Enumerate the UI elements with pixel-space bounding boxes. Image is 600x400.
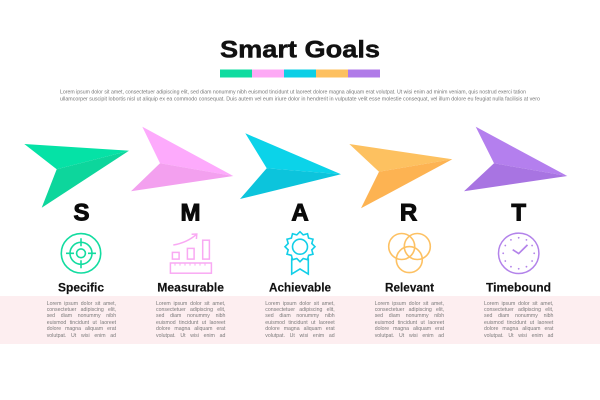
text: achievable: consectetuer adipiscing elit, xyxy=(265,307,335,313)
intro text: ullamcorper suscipit lobortis nisl ut aliquip ex ea commodo consequat. Duis autem vel eum iriure dolor in hendrerit in vulputate velit esse molestie consequat, vel illum dolore eu feugiat nulla facilisis at vero xyxy=(60,96,540,102)
SMART letters: T xyxy=(511,200,526,226)
text: specific: sed diam nonummy nibh xyxy=(47,313,116,319)
text: relevant: consectetuer adipiscing elit, xyxy=(375,307,444,313)
text: specific: dolore magna aliquam erat xyxy=(47,326,116,332)
text: measurable: volutpat. Ut wisi enim ad xyxy=(156,333,225,339)
icon: target xyxy=(61,234,101,273)
SMART letters xyxy=(73,200,526,226)
text: specific: euismod tincidunt ut laoreet xyxy=(47,320,116,326)
text: relevant: sed diam nonummy nibh xyxy=(375,313,444,319)
colour legend bar xyxy=(220,70,380,78)
text: timebound: volutpat. Ut wisi enim ad xyxy=(484,333,553,339)
text: relevant: dolore magna aliquam erat xyxy=(375,326,444,332)
text: relevant: euismod tincidunt ut laoreet xyxy=(375,320,444,326)
text: measurable: Lorem ipsum dolor sit amet, xyxy=(156,300,225,306)
text: achievable: Lorem ipsum dolor sit amet, xyxy=(265,300,335,306)
goal labels xyxy=(58,282,551,294)
SMART letters: S xyxy=(73,200,90,226)
text: achievable: dolore magna aliquam erat xyxy=(265,326,335,332)
text: specific xyxy=(46,300,116,339)
text: measurable: euismod tincidunt ut laoreet xyxy=(156,320,225,326)
pink text band xyxy=(0,296,600,344)
intro text: Lorem ipsum dolor sit amet, consectetuer adipiscing elit, sed diam nonummy nibh euismod tincidunt ut laoreet dolore magna aliquam erat volutpat. Ut wisi enim ad minim veniam, quis nostrud exerci tation xyxy=(60,90,526,96)
text: specific: consectetuer adipiscing elit, xyxy=(47,307,116,313)
goal labels: Timebound xyxy=(486,282,551,294)
text: measurable xyxy=(156,300,226,339)
SMART letters: R xyxy=(400,200,417,226)
text: relevant: Lorem ipsum dolor sit amet, xyxy=(375,300,444,306)
arrow: green xyxy=(24,144,129,208)
text: relevant: volutpat. Ut wisi enim ad xyxy=(375,333,444,339)
goal labels: Specific xyxy=(58,282,105,294)
text: timebound: sed diam nonummy nibh xyxy=(484,313,553,319)
text: measurable: sed diam nonummy nibh xyxy=(156,313,225,319)
text: specific: volutpat. Ut wisi enim ad xyxy=(47,333,116,339)
text: measurable: consectetuer adipiscing elit, xyxy=(156,307,225,313)
text: measurable: dolore magna aliquam erat xyxy=(156,326,225,332)
goal labels: Measurable xyxy=(157,282,224,294)
title: Smart Goals xyxy=(220,36,380,64)
icon: award badge xyxy=(285,232,315,274)
intro text xyxy=(60,90,540,102)
SMART letters: M xyxy=(180,200,200,226)
text: achievable: euismod tincidunt ut laoreet xyxy=(265,320,335,326)
goal labels: Achievable xyxy=(269,282,331,294)
text: achievable xyxy=(265,300,335,339)
text: relevant xyxy=(374,300,444,339)
icon: growth chart on ruler xyxy=(170,234,211,273)
arrow: purple xyxy=(464,127,567,191)
arrow: pink xyxy=(131,127,233,191)
text: achievable: volutpat. Ut wisi enim ad xyxy=(265,333,335,339)
text: timebound: Lorem ipsum dolor sit amet, xyxy=(484,300,553,306)
text: timebound: consectetuer adipiscing elit, xyxy=(484,307,553,313)
icon: overlapping circles xyxy=(389,234,430,273)
text: specific: Lorem ipsum dolor sit amet, xyxy=(47,300,116,306)
SMART letters: A xyxy=(291,200,309,226)
icon: clock xyxy=(498,233,539,274)
arrow: cyan xyxy=(240,133,341,199)
text: achievable: sed diam nonummy nibh xyxy=(265,313,335,319)
goal labels: Relevant xyxy=(385,282,434,294)
text: timebound: euismod tincidunt ut laoreet xyxy=(484,320,553,326)
text: timebound: dolore magna aliquam erat xyxy=(484,326,553,332)
text: timebound xyxy=(484,300,554,339)
arrow: orange xyxy=(349,144,452,208)
